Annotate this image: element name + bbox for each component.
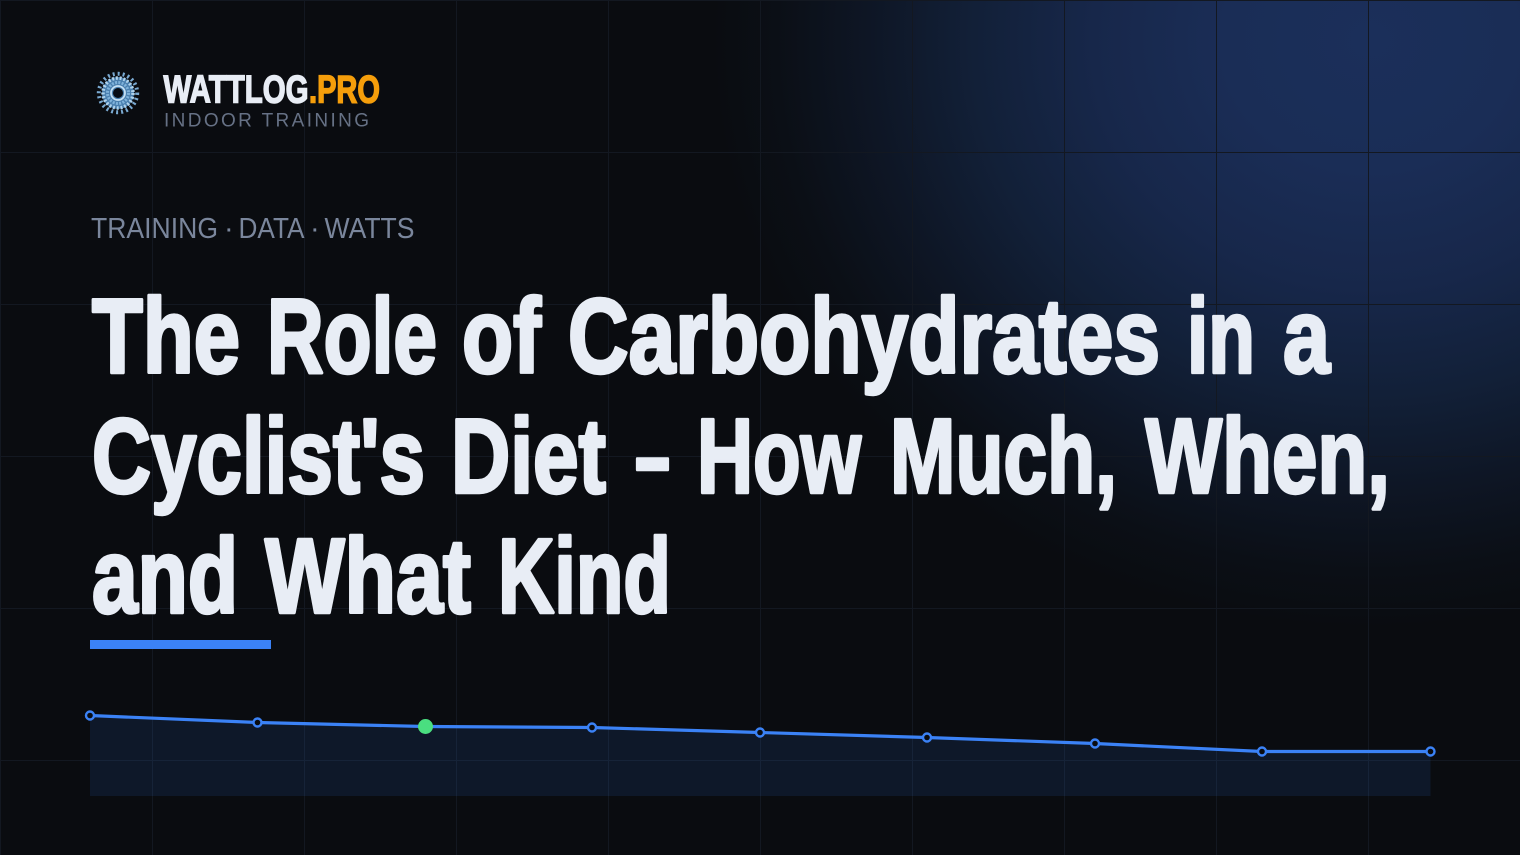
title: Much, [890,398,1117,516]
chart line [90,716,1430,752]
logo tagline: INDOOR TRAINING [164,110,369,132]
title: How [697,398,861,516]
title: in [1187,278,1255,396]
accent bar [90,640,271,649]
eyebrow text: WATTS [324,213,414,245]
title: and [92,518,238,636]
title: – [635,398,670,516]
logo wordmark: .PRO [309,68,380,112]
eyebrow text: · [224,213,234,245]
eyebrow text [91,213,414,245]
highlighted data point [418,719,433,734]
logo icon: cassette gear [99,74,137,112]
title: The [92,278,240,396]
eyebrow text: DATA [238,213,305,245]
chart area fill [90,716,1430,796]
logo wordmark: WATTLOG [164,68,308,112]
title: of [462,278,542,396]
title: Carbohydrates [568,278,1160,396]
chart data points [86,712,1434,756]
title: Role [267,278,437,396]
title: a [1283,278,1331,396]
eyebrow text: TRAINING [91,213,218,245]
title: Cyclist's [92,398,425,516]
eyebrow text: · [310,213,320,245]
title [92,278,1390,636]
title: Kind [498,518,671,636]
line chart [86,712,1434,796]
title: When, [1145,398,1390,516]
title: What [265,518,471,636]
title: Diet [451,398,606,516]
